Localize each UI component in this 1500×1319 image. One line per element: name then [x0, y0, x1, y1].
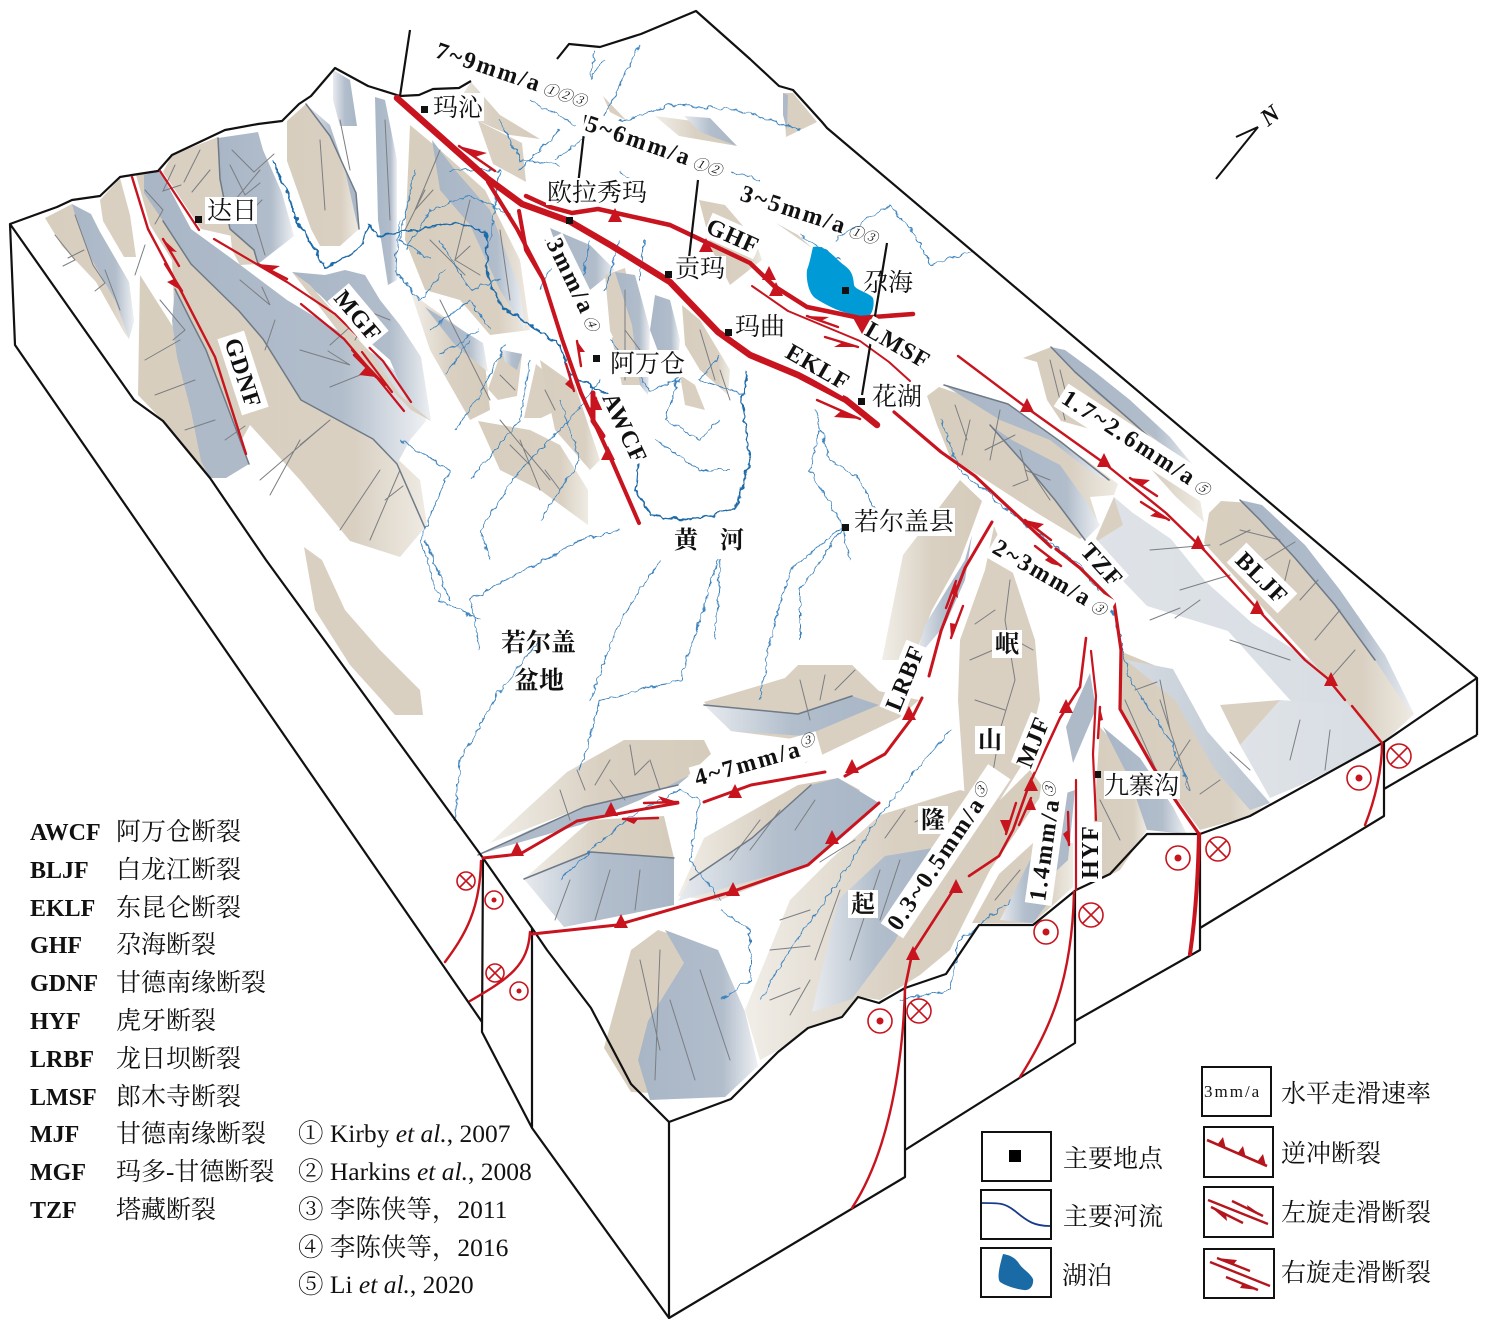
- legend: fault abbreviations: LMSF: [30, 1085, 97, 1111]
- legend: references: ① Kirby et al., 2007: [298, 1119, 511, 1148]
- label: 黄河: 河: [720, 527, 744, 554]
- legend item: 逆冲断裂: 逆冲断裂: [1281, 1140, 1381, 1168]
- place: 花湖: 花湖: [872, 383, 922, 411]
- north arrow: N: [1255, 100, 1287, 132]
- legend item: 湖泊: 湖泊: [1062, 1262, 1112, 1290]
- place: 尕海: 尕海: [863, 269, 913, 297]
- out-of-plane symbols: [485, 766, 1371, 1033]
- fault label: AWCF: AWCF: [597, 389, 652, 468]
- legend item: 湖泊: [981, 1248, 1112, 1297]
- legend: fault abbreviations: 龙日坝断裂: [116, 1045, 241, 1073]
- fault label: LMSF: LMSF: [860, 317, 935, 375]
- label: 黄河: 黄: [674, 527, 701, 554]
- slip symbols: [457, 744, 1411, 1033]
- legend: fault abbreviations: 郎木寺断裂: [116, 1083, 241, 1111]
- legend: references: ② Harkins et al., 2008: [298, 1157, 532, 1186]
- legend: fault abbreviations: 阿万仓断裂: [116, 818, 241, 846]
- fault: MJF: [905, 638, 1086, 988]
- thrust teeth: [510, 208, 1338, 960]
- legend: fault abbreviations: MJF: [30, 1122, 79, 1148]
- rate: 3mm/a: [540, 232, 614, 348]
- legend: fault abbreviations: EKLF: [30, 896, 95, 922]
- place: 欧拉秀玛: 欧拉秀玛: [547, 179, 647, 207]
- fault: MGF: [160, 171, 411, 411]
- fault label: HYF: HYF: [1078, 825, 1104, 879]
- legend: fault abbreviations: GHF: [30, 933, 82, 959]
- mountains: east group: [927, 347, 1414, 830]
- legend: fault abbreviations: 虎牙断裂: [116, 1007, 216, 1035]
- fault label: BLJF: BLJF: [1230, 547, 1293, 610]
- fault label: GHF: GHF: [702, 214, 763, 260]
- legend: references: [298, 1119, 532, 1299]
- lake: Gahai: [807, 247, 874, 317]
- legend: fault abbreviations: 甘德南缘断裂: [116, 969, 266, 997]
- faults on block faces: [445, 743, 1382, 1208]
- legend item: 右旋走滑断裂: [1204, 1249, 1431, 1298]
- fault label: MGF: MGF: [328, 286, 386, 348]
- legend: fault abbreviations: 甘德南缘断裂: [116, 1120, 266, 1148]
- fault: LRBF: [483, 522, 992, 858]
- fault: EKLF: [397, 98, 877, 425]
- legend: fault abbreviations: [30, 818, 274, 1224]
- rate: 4~7mm/a: ③: [797, 731, 819, 752]
- rate: 4~7mm/a: 4~7mm/a: [691, 736, 805, 792]
- rate: 1.4mm/a: ③: [1041, 779, 1060, 799]
- fault label: GDNF: GDNF: [219, 335, 266, 412]
- rate: 0.3~0.5mm/a: ③: [970, 778, 994, 802]
- rate: 1.4mm/a: 1.4mm/a: [1025, 796, 1065, 903]
- rate: 3mm/a: 3mm/a④: [541, 234, 609, 337]
- label: 岷山隆起: 岷: [995, 631, 1019, 658]
- legend item: 左旋走滑断裂: 左旋走滑断裂: [1281, 1199, 1431, 1227]
- rate: 2~3mm/a: 2~3mm/a③: [988, 535, 1114, 622]
- legend item: 水平走滑速率: 3mm/a: [1204, 1082, 1261, 1101]
- legend item: 左旋走滑断裂: [1204, 1187, 1431, 1237]
- legend: references: ③ 李陈侠等，2011: [298, 1195, 507, 1224]
- north arrow: [1216, 100, 1287, 179]
- mountains: central ridges: [550, 93, 817, 410]
- label: 岷山隆起: 起: [851, 891, 875, 918]
- fault: southern thrust: [532, 803, 879, 934]
- rate: 0.3~0.5mm/a: 0.3~0.5mm/a: [882, 792, 991, 935]
- place: 玛曲: 玛曲: [735, 313, 785, 341]
- fault: GDNF: [132, 177, 246, 454]
- fault label: LRBF: LRBF: [881, 642, 931, 715]
- fault label: TZF: TZF: [1075, 539, 1128, 593]
- label: 岷山隆起: 山: [978, 727, 1002, 754]
- out-of-plane centre dots: [492, 774, 1362, 1024]
- legend: fault abbreviations: 玛多-甘德断裂: [116, 1158, 274, 1186]
- mountain edge lines: [163, 104, 1375, 880]
- label: 若尔盖盆地: 若尔盖: [501, 629, 576, 657]
- fault: AWCF: [488, 182, 639, 523]
- place: 达日: 达日: [207, 197, 257, 225]
- fault: LMSF: [752, 286, 910, 381]
- place: 阿万仓: 阿万仓: [610, 350, 685, 378]
- legend: symbols: [981, 1067, 1431, 1298]
- label: 黄河: [674, 527, 744, 554]
- legend: references: ④ 李陈侠等，2016: [298, 1233, 508, 1262]
- rate: 0.3~0.5mm/a: [881, 764, 1010, 938]
- rate: 1.7~2.6mm/a: 1.7~2.6mm/a⑤: [1057, 385, 1218, 503]
- label: 若尔盖盆地: [501, 629, 576, 695]
- legend: fault abbreviations: 塔藏断裂: [116, 1196, 216, 1224]
- strike-slip arrows: [163, 146, 1169, 845]
- label: 岷山隆起: [848, 630, 1022, 918]
- legend item: 水平走滑速率: 水平走滑速率: [1281, 1080, 1431, 1108]
- legend item: 右旋走滑断裂: 右旋走滑断裂: [1281, 1259, 1431, 1287]
- fault: HYF: [1076, 651, 1096, 890]
- legend: fault abbreviations: BLJF: [30, 858, 89, 884]
- leader lines: [400, 30, 887, 395]
- ridge lines: [55, 120, 1355, 1080]
- legend item: 逆冲断裂: [1204, 1127, 1381, 1177]
- fault: GHF: [526, 196, 913, 318]
- legend: fault abbreviations: 尕海断裂: [116, 931, 216, 959]
- legend item: 主要地点: 主要地点: [1063, 1145, 1164, 1173]
- rate: 3~5mm/a: 3~5mm/a①③: [737, 181, 884, 251]
- rate: 7~9mm/a: 7~9mm/a①②③: [432, 38, 593, 114]
- fault label: EKLF: EKLF: [781, 339, 854, 396]
- legend: fault abbreviations: LRBF: [30, 1047, 94, 1073]
- mountains: west group: [45, 70, 600, 715]
- legend: fault abbreviations: 东昆仑断裂: [116, 894, 241, 922]
- fault: BLJF: [958, 356, 1382, 743]
- rivers: [273, 45, 1190, 1000]
- legend: fault abbreviations: 白龙江断裂: [116, 856, 241, 884]
- mountains: south group: [478, 480, 1187, 1100]
- legend item: 主要地点: [982, 1132, 1164, 1181]
- legend item: 水平走滑速率: [1202, 1067, 1431, 1116]
- lake marker: [842, 287, 849, 294]
- into-plane symbols: [457, 744, 1411, 1023]
- legend: fault abbreviations: AWCF: [30, 820, 101, 846]
- label: 岷山隆起: 隆: [921, 807, 945, 834]
- legend: fault abbreviations: HYF: [30, 1009, 81, 1035]
- label: 若尔盖盆地: 盆地: [514, 667, 564, 695]
- fault: AWCF branch: [593, 393, 603, 436]
- rate: 5~6mm/a: 5~6mm/a①②: [582, 111, 728, 183]
- legend: fault abbreviations: MGF: [30, 1160, 86, 1186]
- place: 玛沁: 玛沁: [433, 94, 484, 122]
- place: 欧拉秀玛: [546, 178, 648, 224]
- place: 若尔盖县: 若尔盖县: [854, 508, 954, 536]
- fault label: MJF: MJF: [1012, 713, 1056, 771]
- fault: TZF: [894, 412, 1199, 834]
- place: 九寨沟: 九寨沟: [1104, 772, 1179, 800]
- legend: references: ⑤ Li et al., 2020: [298, 1270, 474, 1299]
- legend item: 主要河流: 主要河流: [1063, 1203, 1163, 1231]
- legend: fault abbreviations: TZF: [30, 1198, 77, 1224]
- legend item: 主要河流: [981, 1190, 1163, 1239]
- legend: fault abbreviations: GDNF: [30, 971, 98, 997]
- place: 贡玛: 贡玛: [675, 255, 725, 283]
